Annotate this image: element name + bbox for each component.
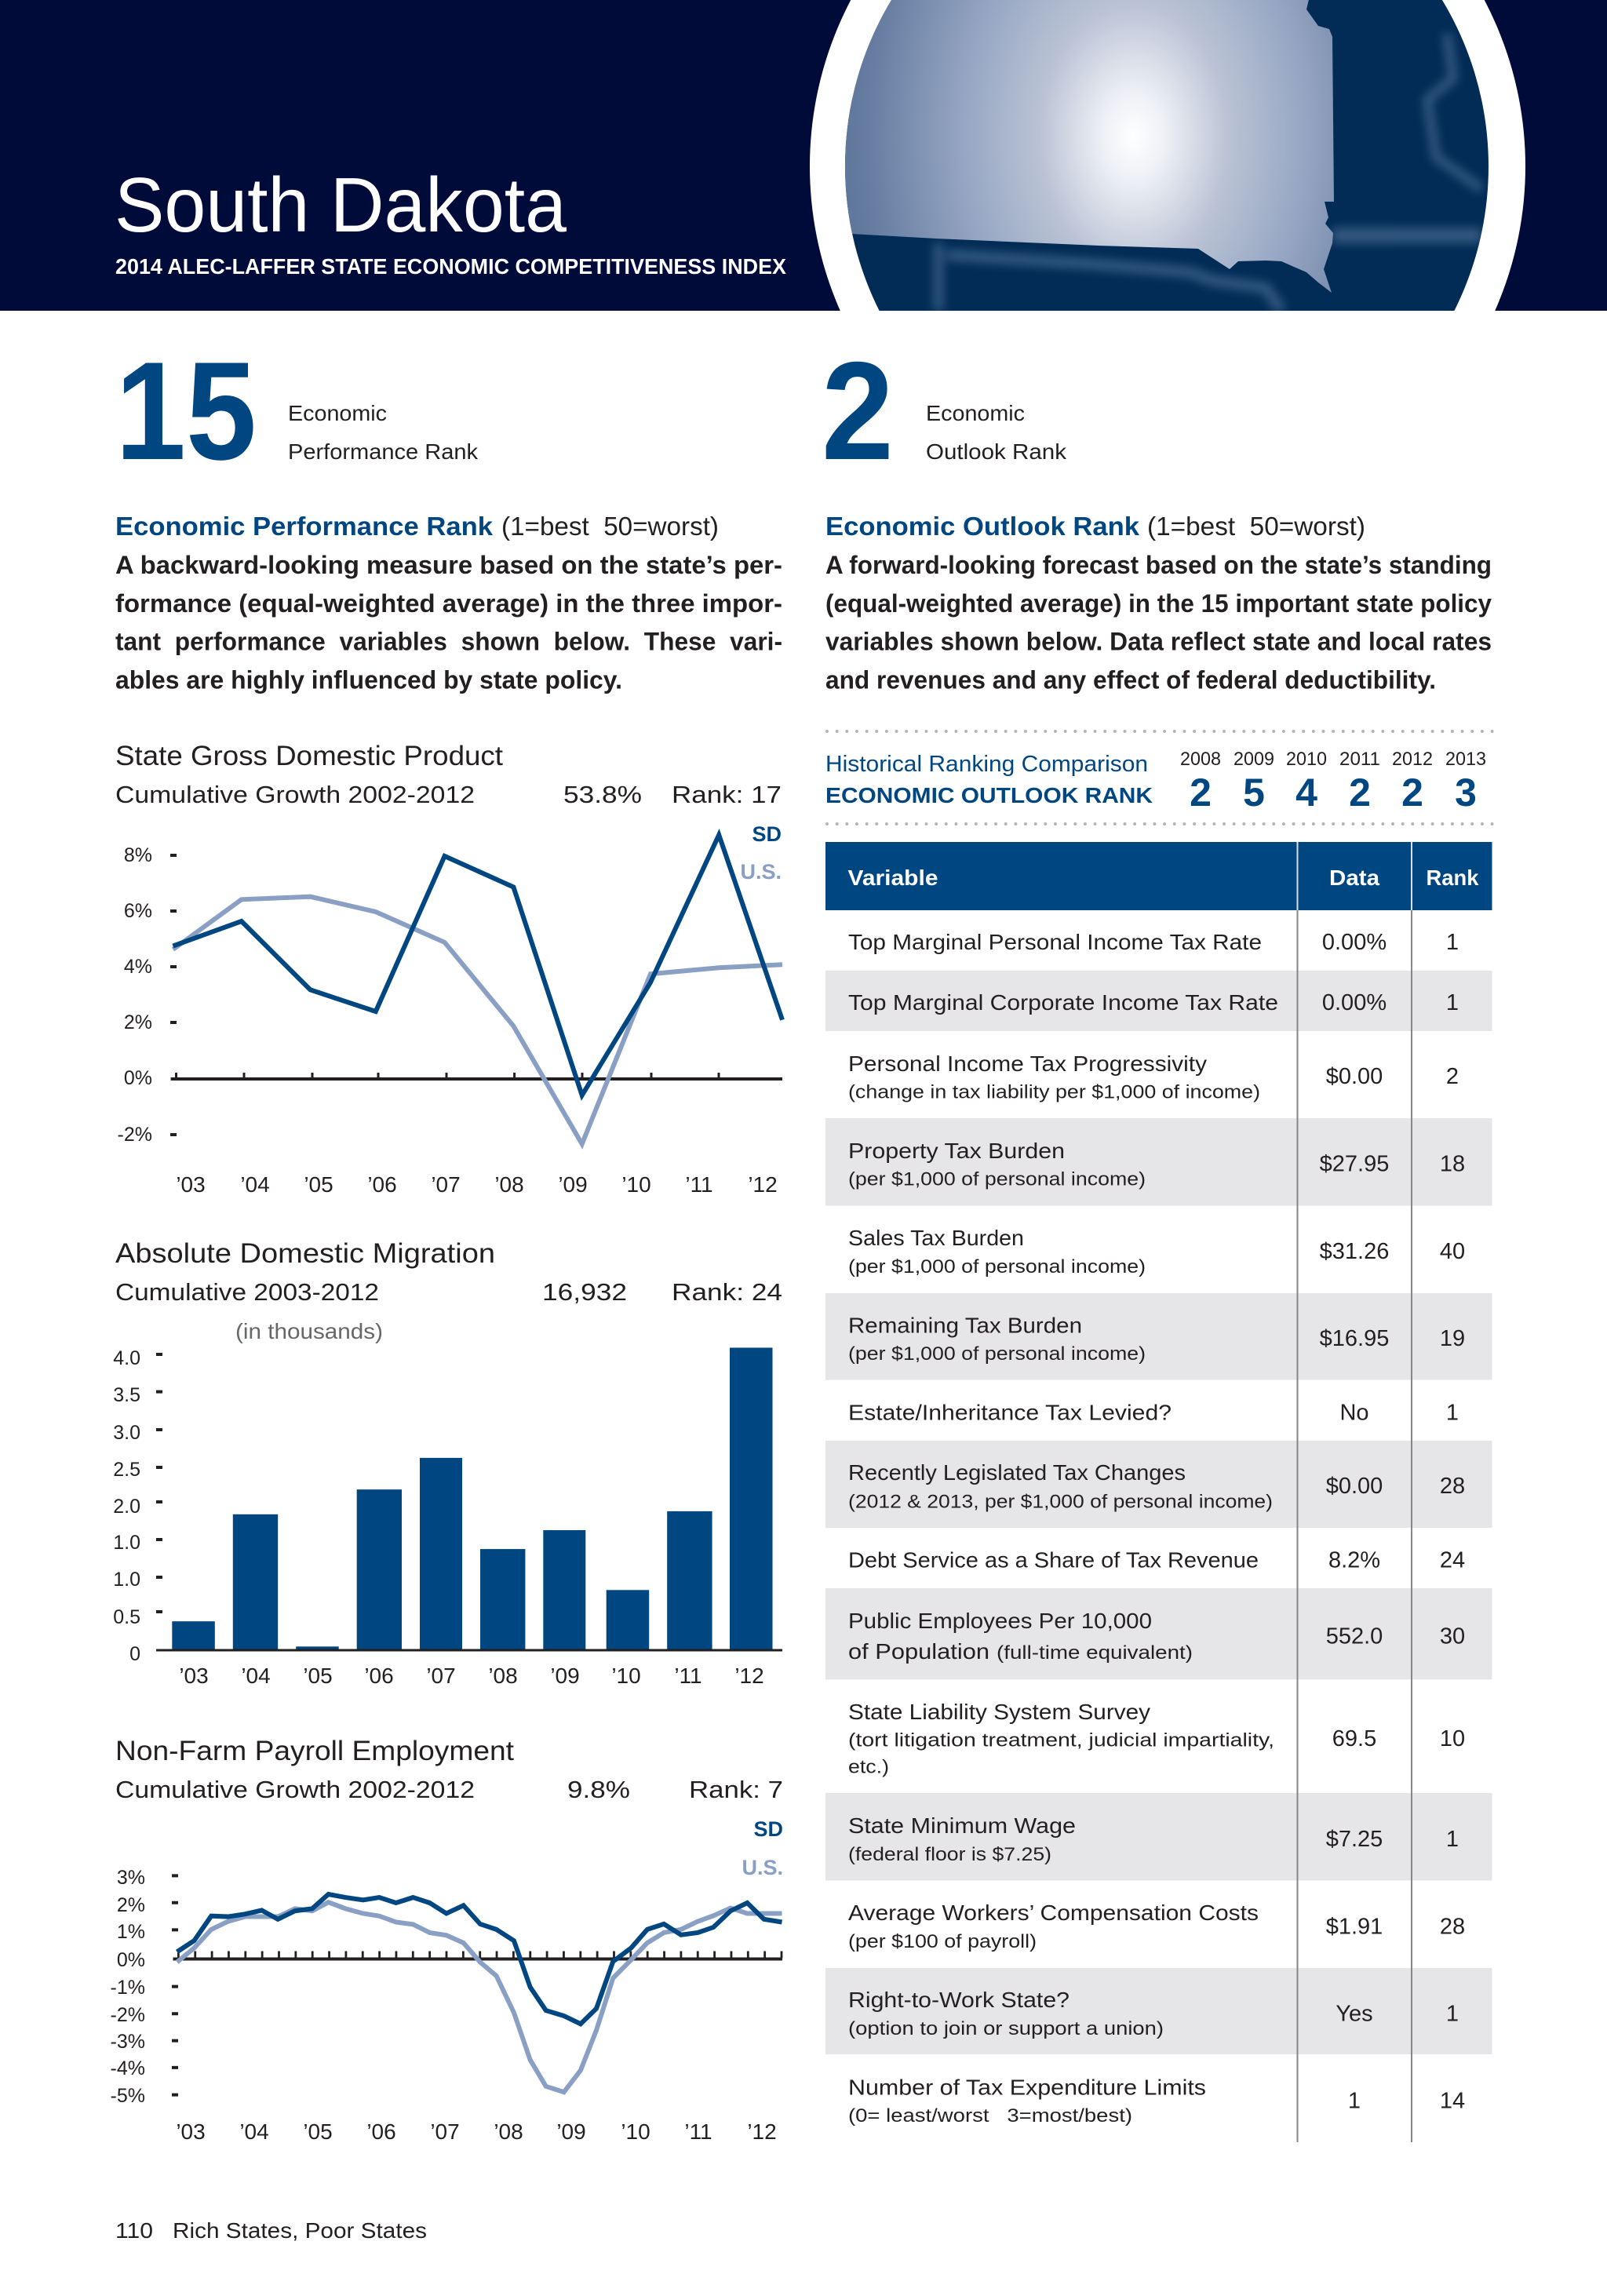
years	[1180, 749, 1486, 770]
baseline axis	[156, 1649, 782, 1651]
row: public employees: Public Employees Per 10,000	[848, 1609, 1152, 1633]
text block: economic performance description: tant performance variables shown below. These vari-	[115, 628, 782, 656]
row: state minimum wage: (federal floor is $7.25)	[848, 1844, 1051, 1865]
title: South Dakota	[115, 162, 567, 248]
row: public employees: of Population	[848, 1639, 989, 1664]
rank values by year: 5	[1243, 771, 1265, 815]
x axis labels: ’10	[621, 1172, 651, 1197]
row: sales tax burden: 40	[1440, 1239, 1465, 1264]
table header	[825, 842, 1492, 910]
row: average workers compensation: Average Workers’ Compensation Costs	[848, 1901, 1259, 1925]
y axis labels: -4%	[111, 2057, 145, 2079]
x axis labels: ’09	[556, 2119, 586, 2144]
row: state minimum wage: State Minimum Wage	[848, 1813, 1076, 1838]
years: 2011	[1339, 749, 1380, 770]
row: top marginal personal income tax rate: 1	[1446, 930, 1459, 955]
text block: economic performance description: Economic Performance Rank	[115, 512, 494, 541]
line: U.S.	[177, 1902, 782, 2092]
row: top marginal personal income tax rate: Top Marginal Personal Income Tax Rate	[848, 930, 1262, 954]
y axis labels: 2%	[117, 1894, 145, 1916]
rank values by year: 2	[1349, 771, 1371, 815]
row: debt service: 8.2%	[1328, 1547, 1380, 1573]
rank values by year: 2	[1401, 771, 1423, 815]
row: personal income tax progressivity: Personal Income Tax Progressivity	[848, 1051, 1207, 1076]
rank: economic outlook 2	[822, 333, 1067, 489]
x axis labels: ’10	[621, 2119, 650, 2144]
row: personal income tax progressivity: 2	[1446, 1064, 1459, 1089]
y axis labels: -2%	[118, 1124, 152, 1146]
row: state liability system survey: 10	[1440, 1726, 1465, 1751]
row: average workers compensation: (per $100 of payroll)	[848, 1931, 1037, 1952]
legend: SD	[753, 1817, 783, 1841]
line: U.S.	[173, 897, 782, 1144]
x axis labels: ’12	[747, 2119, 777, 2144]
y axis labels: 2%	[124, 1011, 152, 1033]
footer: 110	[115, 2218, 153, 2243]
chart heading: migration: Cumulative 2003-2012	[115, 1278, 379, 1306]
row: public employees: (full-time equivalent)	[997, 1642, 1193, 1664]
x axis labels: ’04	[239, 2119, 269, 2144]
y axis labels: 0.5	[113, 1606, 140, 1628]
text block: economic performance description: A backward-looking measure based on the state’s per-	[115, 551, 782, 579]
x axis labels: ’06	[364, 1664, 394, 1688]
icon: South Dakota state map in ringed circle	[810, 0, 1525, 311]
text block: economic outlook description: Economic Outlook Rank	[825, 512, 1140, 541]
y axis labels: 3.0	[113, 1422, 140, 1444]
years: 2013	[1445, 749, 1486, 770]
row: property tax burden: Property Tax Burden	[848, 1139, 1065, 1163]
y axis labels: 0%	[117, 1949, 145, 1971]
y axis labels: -3%	[111, 2031, 145, 2053]
row: average workers compensation: $1.91	[1326, 1915, 1383, 1940]
row: sales tax burden: Sales Tax Burden	[848, 1226, 1024, 1250]
rank: economic outlook 2: Outlook Rank	[926, 439, 1067, 464]
legend: U.S.	[742, 1856, 783, 1879]
row: remaining tax burden: (per $1,000 of personal income)	[848, 1343, 1146, 1365]
panel: historical ranking comparison: Historical Ranking Comparison	[825, 752, 1148, 777]
rank: economic outlook 2: Economic	[926, 401, 1025, 425]
chart heading: GDP	[115, 741, 782, 808]
panel: historical ranking comparison	[825, 731, 1492, 824]
y axis labels: 0	[129, 1643, 140, 1665]
panel: historical ranking comparison: ECONOMIC OUTLOOK RANK	[825, 783, 1153, 807]
x axis labels: ’12	[748, 1172, 778, 1197]
row: debt service: Debt Service as a Share of Tax Revenue	[848, 1547, 1259, 1573]
row: property tax burden: 18	[1440, 1152, 1465, 1177]
legend: U.S.	[740, 860, 782, 884]
y axis labels: 0%	[124, 1067, 152, 1089]
column rules	[1298, 842, 1412, 2142]
bars	[172, 1348, 773, 1650]
rank: economic performance 15: 15	[115, 333, 257, 489]
row: estate inheritance tax: 1	[1446, 1400, 1459, 1425]
years: 2012	[1392, 749, 1433, 770]
y axis labels: 1.0	[113, 1569, 140, 1591]
x axis labels: ’06	[366, 2119, 396, 2144]
subtitle: 2014 ALEC-LAFFER STATE ECONOMIC COMPETITIVENESS INDEX	[115, 254, 786, 279]
y axis labels: 2.0	[113, 1496, 140, 1518]
row: property tax burden	[848, 1139, 1465, 1190]
row: state liability system survey: (tort litigation treatment, judicial impartiality,	[848, 1729, 1274, 1751]
chart heading: employment: Non-Farm Payroll Employment	[115, 1736, 514, 1766]
row: personal income tax progressivity: $0.00	[1326, 1064, 1383, 1089]
row: state liability system survey: etc.)	[848, 1756, 889, 1778]
chart: state gross domestic product	[115, 741, 782, 1197]
rank: economic performance 15	[115, 333, 479, 489]
y axis labels: 3%	[117, 1867, 145, 1889]
row stripes	[825, 971, 1492, 2054]
row: personal income tax progressivity	[848, 1051, 1459, 1103]
row: sales tax burden: (per $1,000 of personal income)	[848, 1256, 1146, 1277]
rank: economic outlook 2: 2	[822, 333, 894, 489]
row: average workers compensation: 28	[1440, 1915, 1465, 1940]
chart heading: migration: (in thousands)	[235, 1319, 383, 1343]
line: South Dakota	[177, 1894, 782, 2024]
text block: economic performance description: formance (equal-weighted average) in the three impor-	[115, 589, 782, 618]
row: top marginal personal income tax rate	[848, 930, 1459, 955]
x axis labels: ’05	[303, 1664, 333, 1688]
row: debt service: 24	[1440, 1547, 1465, 1573]
x axis labels: ’03	[176, 1172, 206, 1197]
row: top marginal corporate income tax rate	[848, 990, 1459, 1015]
row: tax expenditure limits	[848, 2075, 1465, 2127]
row: debt service	[848, 1547, 1465, 1573]
text block: economic outlook description: (equal-weighted average) in the 15 important state policy	[825, 589, 1492, 618]
rank: economic performance 15: Economic	[288, 401, 387, 425]
row: state minimum wage: 1	[1446, 1827, 1459, 1852]
chart heading: migration: Rank: 24	[672, 1278, 782, 1306]
text block: economic performance description: ables are highly influenced by state policy.	[115, 665, 622, 694]
row: state liability system survey: 69.5	[1332, 1726, 1376, 1751]
y axis labels: 6%	[124, 900, 152, 922]
x axis labels: ’11	[674, 1664, 702, 1688]
text block: economic outlook description: (1=best 50=worst)	[1147, 512, 1365, 541]
chart heading: employment: Rank: 7	[689, 1776, 783, 1803]
row: property tax burden: $27.95	[1320, 1152, 1389, 1177]
row: right-to-work: (option to join or support a union)	[848, 2018, 1164, 2039]
text block: economic performance description: (1=best 50=worst)	[501, 512, 719, 541]
y axis labels: 4.0	[113, 1347, 140, 1369]
x axis labels: ’03	[176, 2119, 206, 2144]
y axis labels	[113, 1347, 162, 1665]
x axis labels: ’08	[494, 2119, 523, 2144]
row: top marginal corporate income tax rate: 0.00%	[1322, 990, 1387, 1015]
row: public employees: 552.0	[1326, 1624, 1383, 1649]
row: sales tax burden: $31.26	[1320, 1239, 1389, 1264]
row: right-to-work	[848, 1988, 1459, 2039]
table header: Data	[1329, 866, 1379, 890]
header banner	[0, 0, 1607, 311]
text block: economic outlook description: and revenues and any effect of federal deductibility.	[825, 665, 1436, 694]
row: tax expenditure limits: (0= least/worst 3=most/best)	[848, 2105, 1132, 2127]
x axis labels: ’08	[494, 1172, 524, 1197]
chart heading: GDP: 53.8%	[563, 781, 642, 808]
row: public employees: 30	[1440, 1624, 1465, 1649]
row: personal income tax progressivity: (change in tax liability per $1,000 of income)	[848, 1081, 1260, 1103]
row: remaining tax burden: 19	[1440, 1326, 1465, 1351]
text block: economic outlook description: variables shown below. Data reflect state and local rates	[825, 628, 1492, 656]
footer: Rich States, Poor States	[173, 2218, 427, 2243]
y axis labels: 3.5	[113, 1384, 140, 1406]
chart heading: employment	[115, 1736, 783, 1803]
x axis labels	[176, 1172, 778, 1197]
chart: non-farm payroll employment	[111, 1736, 783, 2144]
row: sales tax burden	[848, 1226, 1465, 1277]
x axis labels: ’11	[685, 1172, 713, 1197]
row: top marginal corporate income tax rate: 1	[1446, 990, 1459, 1015]
x axis labels: ’07	[426, 1664, 456, 1688]
y axis labels: 2.5	[113, 1459, 140, 1481]
row: state minimum wage	[848, 1813, 1459, 1865]
y axis labels: -1%	[111, 1977, 145, 1999]
row: top marginal corporate income tax rate: Top Marginal Corporate Income Tax Rate	[848, 990, 1278, 1015]
y axis labels: -2%	[111, 2004, 145, 2026]
row: recently legislated tax changes: $0.00	[1326, 1474, 1383, 1499]
x axis labels: ’10	[611, 1664, 641, 1688]
x axis labels: ’06	[367, 1172, 397, 1197]
legend: SD	[752, 822, 782, 846]
rank values by year: 2	[1190, 771, 1212, 815]
chart heading: GDP: State Gross Domestic Product	[115, 741, 503, 771]
row: state minimum wage: $7.25	[1326, 1827, 1383, 1852]
y axis labels: 1.0	[113, 1532, 140, 1554]
row: state liability system survey: State Liability System Survey	[848, 1700, 1150, 1724]
row: estate inheritance tax	[848, 1400, 1459, 1425]
row: top marginal personal income tax rate: 0.00%	[1322, 930, 1387, 955]
text block: economic outlook description: A forward-looking forecast based on the state’s standing	[825, 551, 1492, 579]
chart heading: employment: Cumulative Growth 2002-2012	[115, 1776, 475, 1803]
x axis labels: ’07	[431, 1172, 461, 1197]
chart heading: employment: 9.8%	[567, 1776, 630, 1803]
row: recently legislated tax changes: (2012 & 2013, per $1,000 of personal income)	[848, 1491, 1273, 1513]
x axis labels: ’03	[179, 1664, 209, 1688]
row: remaining tax burden: $16.95	[1320, 1326, 1389, 1351]
y axis labels	[118, 844, 177, 1146]
x axis labels	[176, 2119, 777, 2144]
x axis labels: ’09	[550, 1664, 580, 1688]
x axis labels: ’11	[684, 2119, 712, 2144]
row: public employees	[848, 1609, 1465, 1664]
row: right-to-work: 1	[1446, 2001, 1459, 2026]
legend	[740, 822, 782, 884]
x axis labels: ’12	[734, 1664, 764, 1688]
y axis labels: 8%	[124, 844, 152, 866]
y axis labels: 1%	[117, 1921, 145, 1943]
row: recently legislated tax changes: Recently Legislated Tax Changes	[848, 1460, 1186, 1485]
x axis labels: ’05	[303, 2119, 333, 2144]
years: 2008	[1180, 749, 1221, 770]
row: tax expenditure limits: 1	[1348, 2089, 1361, 2114]
row: recently legislated tax changes: 28	[1440, 1474, 1465, 1499]
row: state liability system survey	[848, 1700, 1465, 1778]
row: estate inheritance tax: No	[1339, 1400, 1369, 1425]
x axis labels	[179, 1664, 764, 1688]
chart heading: GDP: Rank: 17	[672, 781, 782, 808]
rank: economic performance 15: Performance Rank	[288, 439, 479, 464]
rank values by year	[1190, 771, 1477, 815]
table header: Variable	[847, 866, 938, 890]
y axis labels: 4%	[124, 956, 152, 978]
table header: Rank	[1427, 866, 1479, 890]
text block: economic outlook description	[825, 512, 1492, 694]
x axis labels: ’07	[430, 2119, 460, 2144]
years: 2010	[1286, 749, 1327, 770]
row: property tax burden: (per $1,000 of personal income)	[848, 1169, 1146, 1190]
y axis labels: -5%	[111, 2085, 145, 2107]
chart heading: migration	[115, 1238, 782, 1343]
row: recently legislated tax changes	[848, 1460, 1465, 1513]
row: right-to-work: Right-to-Work State?	[848, 1988, 1070, 2012]
rank values by year: 4	[1295, 771, 1317, 815]
line: South Dakota	[173, 835, 782, 1095]
rank values by year: 3	[1455, 771, 1477, 815]
row: tax expenditure limits: Number of Tax Expenditure Limits	[848, 2075, 1206, 2100]
row: right-to-work: Yes	[1336, 2001, 1373, 2026]
row: remaining tax burden: Remaining Tax Burden	[848, 1314, 1082, 1337]
table: policy variables	[825, 842, 1492, 2142]
row: remaining tax burden	[848, 1314, 1465, 1365]
zero axis line	[171, 1077, 782, 1081]
chart heading: GDP: Cumulative Growth 2002-2012	[115, 781, 475, 808]
x axis labels: ’04	[240, 1172, 270, 1197]
legend	[742, 1817, 783, 1879]
chart heading: migration: 16,932	[542, 1278, 627, 1306]
zero axis line with monthly ticks	[173, 1955, 783, 1959]
y axis labels	[111, 1867, 178, 2107]
row: tax expenditure limits: 14	[1440, 2089, 1465, 2114]
years: 2009	[1233, 749, 1274, 770]
row: estate inheritance tax: Estate/Inheritance Tax Levied?	[848, 1400, 1172, 1425]
text block: economic performance description	[115, 512, 782, 694]
x axis labels: ’05	[304, 1172, 333, 1197]
x axis labels: ’09	[558, 1172, 588, 1197]
chart: absolute domestic migration	[113, 1238, 782, 1688]
chart heading: migration: Absolute Domestic Migration	[115, 1238, 495, 1269]
row: average workers compensation	[848, 1901, 1465, 1952]
x axis labels: ’08	[488, 1664, 518, 1688]
x axis labels: ’04	[241, 1664, 271, 1688]
